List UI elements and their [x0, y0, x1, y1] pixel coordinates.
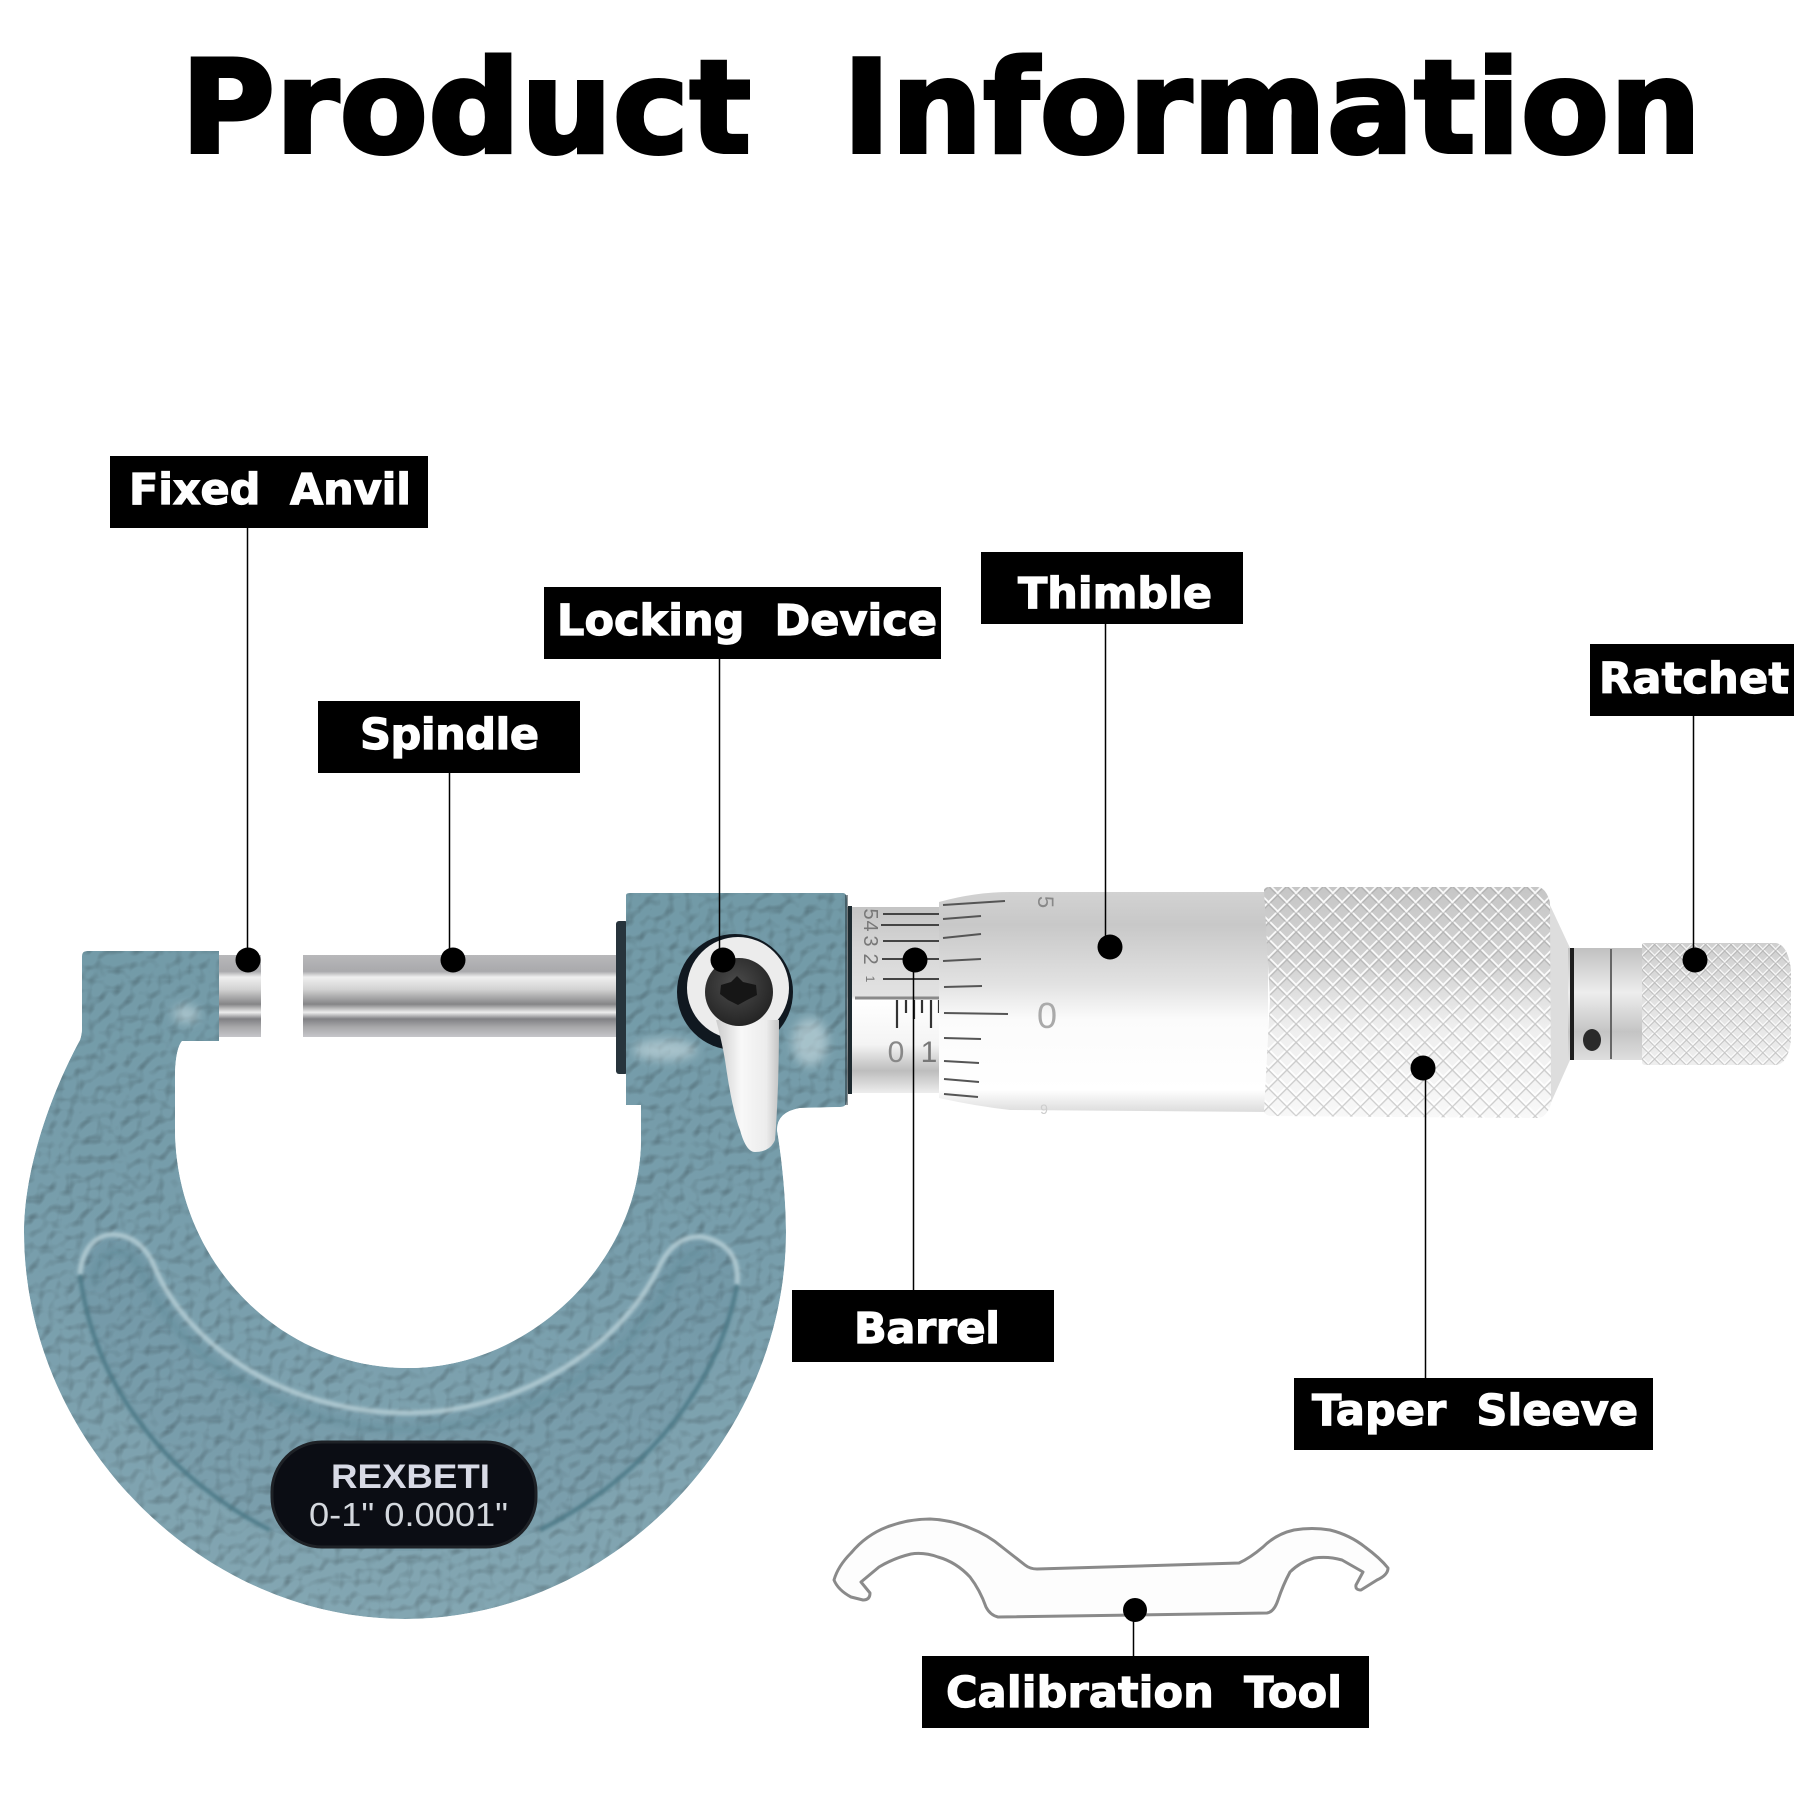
barrel with graduations: 1	[921, 1036, 937, 1069]
spindle rod	[303, 955, 619, 1037]
frame recess	[80, 1235, 737, 1551]
anvil stub	[219, 955, 261, 1037]
callout: Taper Sleeve: Taper Sleeve	[1312, 1386, 1638, 1436]
callout: Thimble: Thimble	[1018, 569, 1212, 619]
callout: Ratchet: Ratchet	[1599, 654, 1789, 704]
sleeve numbers: 4	[859, 920, 881, 932]
brand plate: REXBETI	[331, 1458, 490, 1496]
barrel with graduations	[847, 906, 944, 1094]
frame highlights	[173, 1005, 828, 1066]
sleeve numbers	[859, 908, 881, 983]
callout: Ratchet	[1590, 644, 1794, 972]
callout: Barrel: Barrel	[854, 1304, 1000, 1354]
screw recess	[720, 976, 757, 1005]
title: Product Information	[181, 34, 1701, 183]
callout: Locking Device	[544, 587, 941, 972]
sleeve numbers: 3	[859, 935, 881, 947]
thimble numbers: 5	[1033, 896, 1058, 908]
frame edge shadow near barrel	[845, 895, 848, 1105]
locking device	[677, 934, 793, 1152]
brand plate	[272, 1442, 536, 1547]
callout: Thimble	[981, 552, 1243, 960]
spindle collar shadow	[616, 921, 628, 1074]
calibration wrench	[834, 1519, 1388, 1617]
ratchet knob	[1642, 943, 1791, 1065]
callout: Taper Sleeve	[1294, 1056, 1653, 1450]
ratchet shaft	[1549, 903, 1644, 1107]
callout: Calibration Tool	[922, 1598, 1369, 1728]
sleeve numbers: 5	[859, 908, 881, 920]
barrel with graduations: 0	[888, 1036, 904, 1069]
callout: Fixed Anvil: Fixed Anvil	[129, 465, 411, 515]
callout: Calibration Tool: Calibration Tool	[946, 1668, 1342, 1718]
C frame	[24, 893, 848, 1619]
callout: Barrel	[792, 948, 1054, 1362]
thimble: 9	[1040, 1101, 1048, 1117]
callout: Spindle: Spindle	[360, 710, 539, 760]
sleeve numbers: 2	[859, 953, 881, 965]
brand plate: 0-1" 0.0001"	[309, 1496, 508, 1533]
sleeve numbers: 1	[863, 976, 877, 983]
micrometer	[24, 885, 1791, 1619]
knurled taper sleeve	[1260, 885, 1555, 1120]
callout: Spindle	[318, 701, 580, 972]
thimble	[939, 892, 1268, 1117]
callout: Locking Device: Locking Device	[557, 596, 937, 646]
callout: Fixed Anvil	[110, 456, 428, 972]
thimble: 0	[1037, 995, 1057, 1036]
